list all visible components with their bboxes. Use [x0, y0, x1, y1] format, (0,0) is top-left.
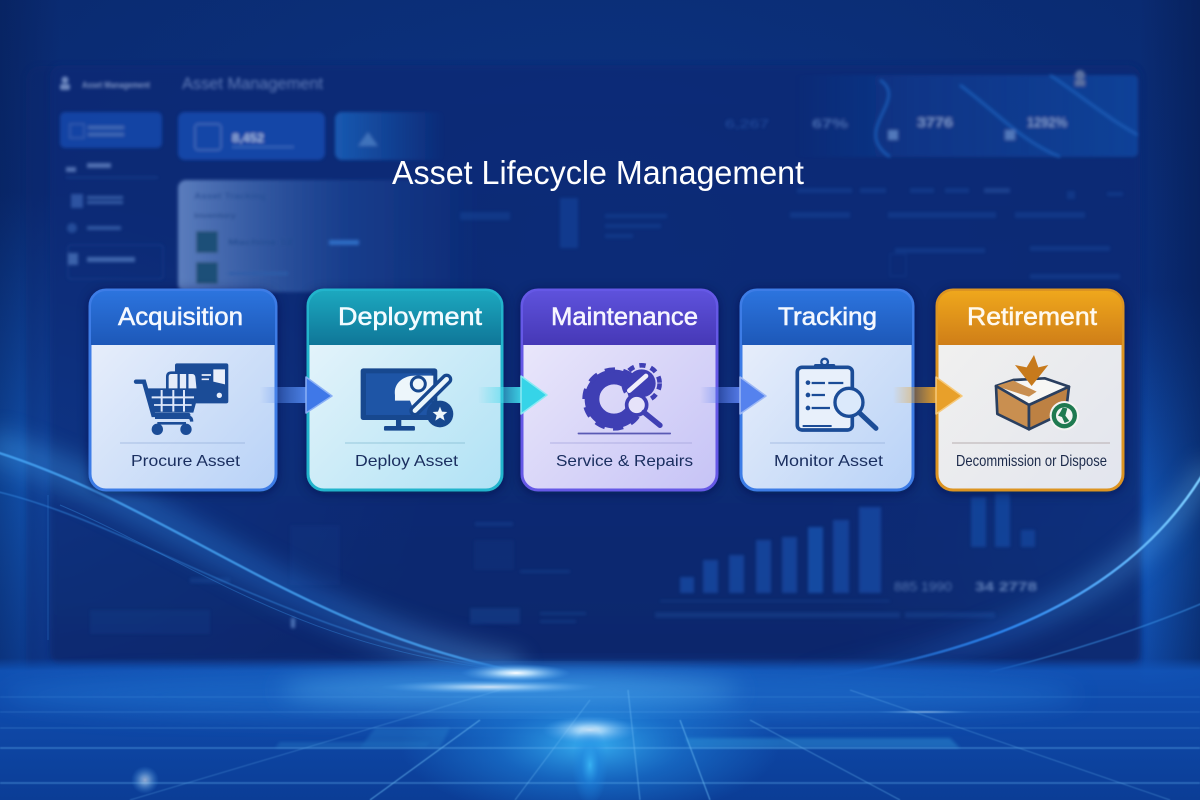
background bar chart	[90, 493, 1037, 634]
dashboard header: Asset Management	[182, 74, 323, 93]
stat band top right: 3776	[917, 114, 953, 130]
stat cards: 8,452	[232, 131, 264, 145]
stat band top right: 6,267	[725, 117, 769, 131]
divider	[120, 442, 245, 444]
stat band top right	[725, 70, 1138, 157]
label: Monitor Asset	[774, 453, 884, 470]
dashboard header	[60, 74, 323, 93]
card: Deployment	[308, 290, 502, 490]
background bar chart: 34 2778	[975, 579, 1037, 594]
divider	[952, 442, 1110, 444]
sidebar	[60, 112, 163, 279]
asset tracking panel: Inventory	[194, 213, 236, 220]
label: Service & Repairs	[556, 453, 693, 470]
divider	[770, 442, 885, 444]
arrow: Maintenance to Tracking	[700, 377, 766, 414]
light curves	[0, 445, 1200, 680]
divider	[345, 442, 465, 444]
card: Tracking	[741, 290, 913, 490]
arrow: Tracking to Retirement	[893, 377, 962, 414]
stat band top right: 67%	[812, 116, 849, 131]
heading: Retirement	[967, 303, 1097, 331]
icon: box with recycle badge	[996, 355, 1079, 430]
label: Deploy Asset	[355, 453, 459, 470]
icon: clipboard with magnifier	[797, 359, 876, 430]
heading: Tracking	[778, 303, 877, 331]
arrow: Deployment to Maintenance	[478, 376, 547, 414]
card: Retirement	[937, 290, 1123, 490]
floor	[0, 658, 1200, 800]
icon: shopping cart	[136, 363, 228, 435]
divider	[550, 442, 692, 444]
heading: Deployment	[338, 303, 482, 331]
asset tracking panel: Machine 12	[228, 238, 294, 247]
title: Asset Lifecycle Management	[392, 154, 804, 191]
icon: monitor	[361, 368, 453, 431]
blurred dashboard backdrop	[26, 65, 1142, 694]
dashboard header: Asset Management	[82, 80, 150, 90]
card: Maintenance	[522, 290, 717, 490]
arrow: Acquisition to Deployment	[260, 377, 332, 413]
label: Decommission or Dispose	[956, 453, 1107, 470]
stat band top right: 1292%	[1027, 114, 1068, 130]
mid ghost rows	[460, 188, 1123, 279]
background bar chart: 885 1990	[894, 579, 952, 594]
heading: Acquisition	[118, 303, 243, 331]
asset tracking panel	[178, 180, 478, 292]
heading: Maintenance	[551, 303, 698, 331]
card: Acquisition	[90, 290, 276, 490]
stat cards	[178, 112, 445, 160]
asset tracking panel: Asset Tracking	[194, 191, 266, 201]
label: Procure Asset	[131, 453, 241, 470]
icon: gears and wrench	[578, 365, 671, 434]
